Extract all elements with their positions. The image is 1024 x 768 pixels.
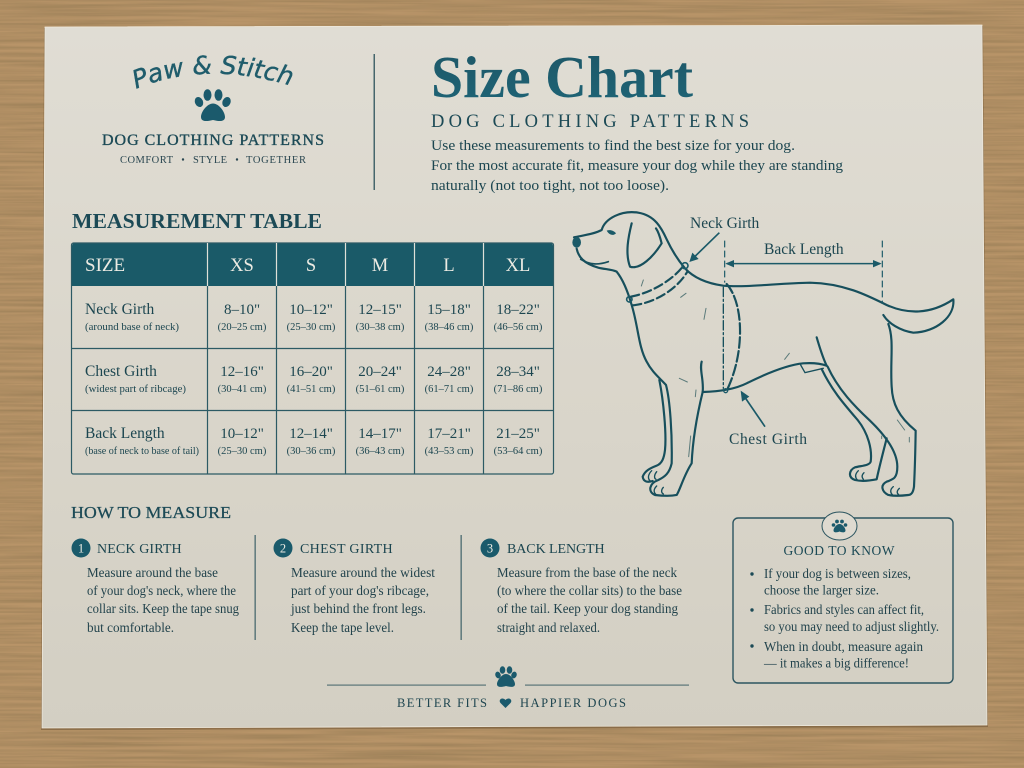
row: chest girth: (71–86 cm) bbox=[494, 384, 543, 395]
tips list: so you may need to adjust slightly. bbox=[764, 619, 939, 634]
tips list: Fabrics and styles can affect fit, bbox=[764, 602, 924, 617]
arrow: neck girth bbox=[689, 233, 719, 262]
tips list: When in doubt, measure again bbox=[764, 639, 923, 654]
tips list: If your dog is between sizes, bbox=[764, 566, 911, 581]
row: chest girth: (51–61 cm) bbox=[356, 384, 405, 395]
brand script name: Paw & Stitch bbox=[133, 55, 292, 89]
row: neck girth bbox=[85, 301, 543, 333]
step 1: neck girth: NECK GIRTH bbox=[97, 542, 182, 557]
table header row: SIZE bbox=[85, 255, 125, 276]
near hind leg bbox=[828, 324, 916, 496]
brand subtitle: DOG CLOTHING PATTERNS bbox=[102, 132, 324, 149]
label: back length: Back Length bbox=[764, 241, 844, 258]
step 2: chest girth bbox=[274, 538, 435, 635]
mouth bbox=[581, 259, 608, 264]
row: back length: (53–64 cm) bbox=[494, 446, 543, 457]
row: back length: (30–36 cm) bbox=[287, 446, 336, 457]
table header row: XL bbox=[506, 256, 530, 276]
nose bbox=[572, 237, 581, 248]
row: neck girth: 8–10" bbox=[224, 302, 260, 318]
step 3: back length bbox=[480, 538, 682, 635]
row: neck girth: 15–18" bbox=[427, 302, 471, 318]
row: back length: 21–25" bbox=[496, 426, 540, 442]
step 2: chest girth: Keep the tape level. bbox=[291, 620, 394, 635]
row: neck girth: (20–25 cm) bbox=[218, 322, 267, 333]
brand tagline: STYLE bbox=[193, 155, 227, 166]
subtitle: DOG CLOTHING PATTERNS bbox=[431, 112, 749, 132]
row: back length: (43–53 cm) bbox=[425, 446, 474, 457]
far hind leg bbox=[822, 369, 887, 481]
intro text: naturally (not too tight, not too loose). bbox=[431, 178, 669, 194]
dog diagram bbox=[572, 212, 953, 496]
row: chest girth: (widest part of ribcage) bbox=[85, 384, 187, 395]
row: neck girth: 10–12" bbox=[289, 302, 333, 318]
eye bbox=[607, 230, 616, 235]
footer: HAPPIER DOGS bbox=[520, 696, 626, 710]
step 3: back length: straight and relaxed. bbox=[497, 620, 600, 635]
step 2: chest girth: just behind the front legs. bbox=[290, 601, 426, 616]
table header row: S bbox=[306, 256, 316, 276]
panel: good to know bbox=[733, 512, 953, 683]
icon: paw bbox=[193, 89, 232, 121]
row: back length: 17–21" bbox=[427, 426, 471, 442]
step 2: chest girth: 2 bbox=[280, 542, 286, 556]
step 2: chest girth: part of your dog's ribcage, bbox=[291, 583, 429, 598]
neck measure dashes bbox=[631, 265, 687, 305]
icon: heart bbox=[500, 699, 511, 708]
step 1: neck girth: 1 bbox=[78, 542, 84, 556]
toes bbox=[648, 471, 899, 495]
row: chest girth: (30–41 cm) bbox=[218, 384, 267, 395]
back length dimension line bbox=[725, 241, 882, 304]
how to measure heading: HOW TO MEASURE bbox=[71, 503, 231, 522]
row: chest girth: (41–51 cm) bbox=[287, 384, 336, 395]
tips list: choose the larger size. bbox=[764, 582, 879, 598]
row: chest girth: 16–20" bbox=[289, 364, 333, 380]
belly bbox=[703, 363, 827, 392]
row: neck girth: (38–46 cm) bbox=[425, 322, 474, 333]
arrow: chest girth bbox=[741, 391, 765, 427]
label: neck girth: Neck Girth bbox=[690, 215, 760, 232]
step 2: chest girth: CHEST GIRTH bbox=[300, 542, 393, 557]
row: neck girth: (30–38 cm) bbox=[356, 322, 405, 333]
row: neck girth: Neck Girth bbox=[85, 301, 155, 318]
brand tagline bbox=[120, 155, 306, 166]
ear bbox=[627, 223, 662, 267]
row: neck girth: (25–30 cm) bbox=[287, 322, 336, 333]
brand tagline: COMFORT bbox=[120, 155, 174, 166]
step 3: back length: BACK LENGTH bbox=[507, 542, 605, 557]
step 3: back length: Measure from the base of the neck bbox=[497, 565, 677, 580]
icon: paw badge bbox=[822, 512, 857, 540]
step 1: neck girth: of your dog's neck, where the bbox=[87, 583, 236, 598]
footer bbox=[327, 666, 689, 710]
chest measure dashes bbox=[723, 284, 740, 393]
row: back length: (25–30 cm) bbox=[218, 446, 267, 457]
tips list bbox=[750, 566, 939, 670]
measurement table heading: MEASUREMENT TABLE bbox=[72, 209, 322, 233]
tips list: — it makes a big difference! bbox=[763, 656, 909, 670]
row: neck girth: (46–56 cm) bbox=[494, 322, 543, 333]
step 1: neck girth bbox=[72, 538, 239, 635]
row: back length bbox=[85, 425, 543, 457]
step 1: neck girth: Measure around the base bbox=[87, 565, 218, 580]
intro text: For the most accurate fit, measure your dog while they are standing bbox=[431, 158, 843, 174]
row: chest girth: 12–16" bbox=[220, 364, 264, 380]
dog outline bbox=[572, 212, 953, 496]
step 3: back length: of the tail. Keep your dog standing bbox=[497, 601, 678, 616]
brand logo bbox=[102, 55, 324, 166]
good to know heading: GOOD TO KNOW bbox=[784, 543, 895, 558]
row: chest girth: 20–24" bbox=[358, 364, 402, 380]
step 2: chest girth: Measure around the widest bbox=[291, 565, 435, 580]
row: chest girth: 28–34" bbox=[496, 364, 540, 380]
row: back length: (36–43 cm) bbox=[356, 446, 405, 457]
intro text: Use these measurements to find the best size for your dog. bbox=[431, 138, 795, 154]
row: chest girth: Chest Girth bbox=[85, 363, 157, 380]
icon: footer paw bbox=[494, 666, 518, 687]
step 1: neck girth: but comfortable. bbox=[87, 620, 174, 635]
label: chest girth: Chest Girth bbox=[729, 431, 807, 448]
row: back length: 14–17" bbox=[358, 426, 402, 442]
row: neck girth: (around base of neck) bbox=[85, 322, 180, 333]
footer tagline: BETTER FITS bbox=[397, 696, 487, 710]
back and tail bbox=[574, 212, 953, 333]
row: neck girth: 12–15" bbox=[358, 302, 402, 318]
table header row bbox=[72, 243, 553, 286]
row: chest girth: (61–71 cm) bbox=[425, 384, 474, 395]
neck and far front leg bbox=[577, 249, 703, 496]
row: back length: Back Length bbox=[85, 425, 165, 442]
intro text bbox=[431, 138, 843, 194]
step 1: neck girth: collar sits. Keep the tape snug bbox=[87, 601, 239, 616]
step 3: back length: 3 bbox=[487, 542, 493, 556]
row: back length: (base of neck to base of tail) bbox=[85, 446, 199, 457]
title: Size Chart bbox=[431, 44, 693, 110]
measurement table bbox=[71, 243, 554, 474]
table header row: L bbox=[443, 256, 455, 276]
row: back length: 12–14" bbox=[289, 426, 333, 442]
table header row: M bbox=[372, 256, 388, 276]
row: back length: 10–12" bbox=[220, 426, 264, 442]
brand tagline: TOGETHER bbox=[246, 155, 306, 166]
step 3: back length: (to where the collar sits) to the base bbox=[497, 583, 682, 598]
row: neck girth: 18–22" bbox=[496, 302, 540, 318]
table header row: XS bbox=[230, 256, 254, 276]
row: chest girth: 24–28" bbox=[427, 364, 471, 380]
row: chest girth bbox=[85, 363, 543, 395]
